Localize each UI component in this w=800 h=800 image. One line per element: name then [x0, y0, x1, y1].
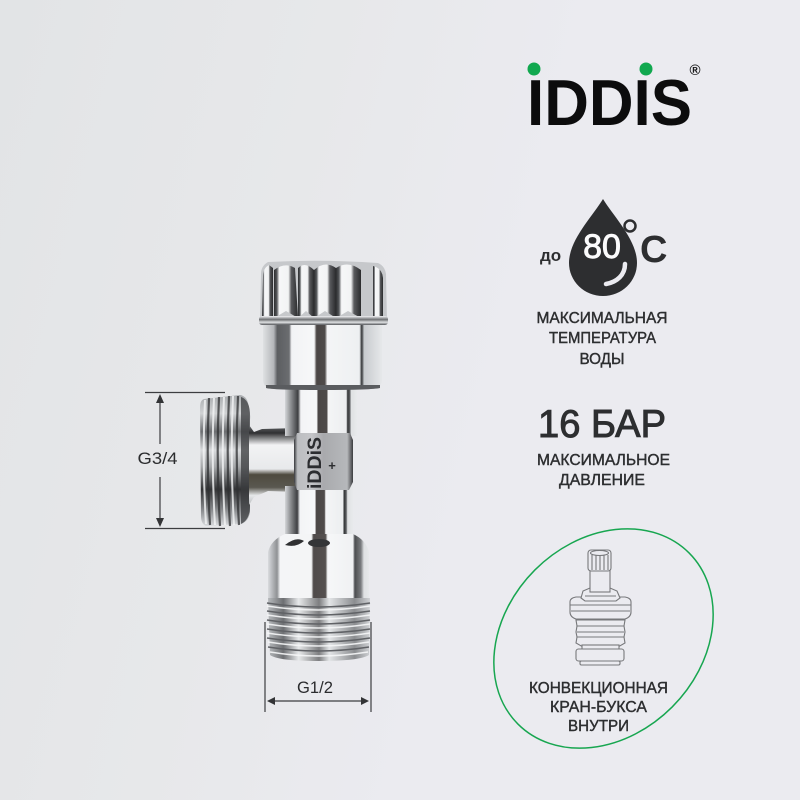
icon: cartridge drawing: [570, 550, 631, 665]
dimension G1/2: [265, 622, 371, 712]
dimension G3/4: G3/4: [138, 449, 178, 468]
valve side outlet thread: [200, 395, 250, 526]
text: max temperature: ВОДЫ: [580, 351, 624, 368]
green tilted ellipse: [449, 484, 758, 793]
logo IDDIS: ®: [689, 62, 701, 79]
valve lower body: [268, 534, 369, 598]
valve fluted handle: [259, 261, 388, 325]
valve centre block with logo: +: [328, 458, 336, 473]
text: cartridge label: ВНУТРИ: [568, 718, 629, 735]
chrome valve photo: [200, 261, 388, 661]
heading: 16 bar: 16 БАР: [538, 403, 666, 446]
degree ring: [624, 220, 636, 232]
text: cartridge label: КОНВЕКЦИОННАЯ: [529, 680, 668, 697]
valve body below handle: [263, 322, 382, 388]
text: max pressure: МАКСИМАЛЬНОЕ: [537, 452, 670, 469]
logo green dots: [528, 62, 652, 76]
valve lower stem: [285, 486, 353, 538]
valve centre block with logo: [294, 433, 353, 490]
valve upper stem: [285, 388, 357, 436]
icon: water drop: [569, 199, 637, 296]
dimension G3/4: [138, 392, 225, 528]
logo IDDIS: IDDIS: [527, 66, 692, 139]
dimension G1/2: G1/2: [297, 678, 333, 697]
text: cartridge label: КРАН-БУКСА: [550, 699, 648, 716]
drop highlight: [606, 264, 625, 284]
text: max pressure: ДАВЛЕНИЕ: [559, 472, 645, 489]
temperature icon: до: [540, 246, 561, 265]
valve centre block with logo: iDDiS: [305, 437, 326, 489]
text: max temperature: МАКСИМАЛЬНАЯ: [536, 310, 668, 327]
text: max temperature: [536, 310, 668, 368]
temperature icon: 80: [583, 228, 621, 266]
valve bottom thread: [267, 598, 370, 661]
temperature icon: [540, 199, 667, 296]
temperature icon: С: [640, 229, 667, 271]
text: max pressure: [537, 452, 670, 489]
text: cartridge label: [529, 680, 668, 735]
text: max temperature: ТЕМПЕРАТУРА: [549, 330, 657, 347]
valve side pipe: [249, 425, 298, 505]
green outline with cartridge: [449, 484, 758, 793]
